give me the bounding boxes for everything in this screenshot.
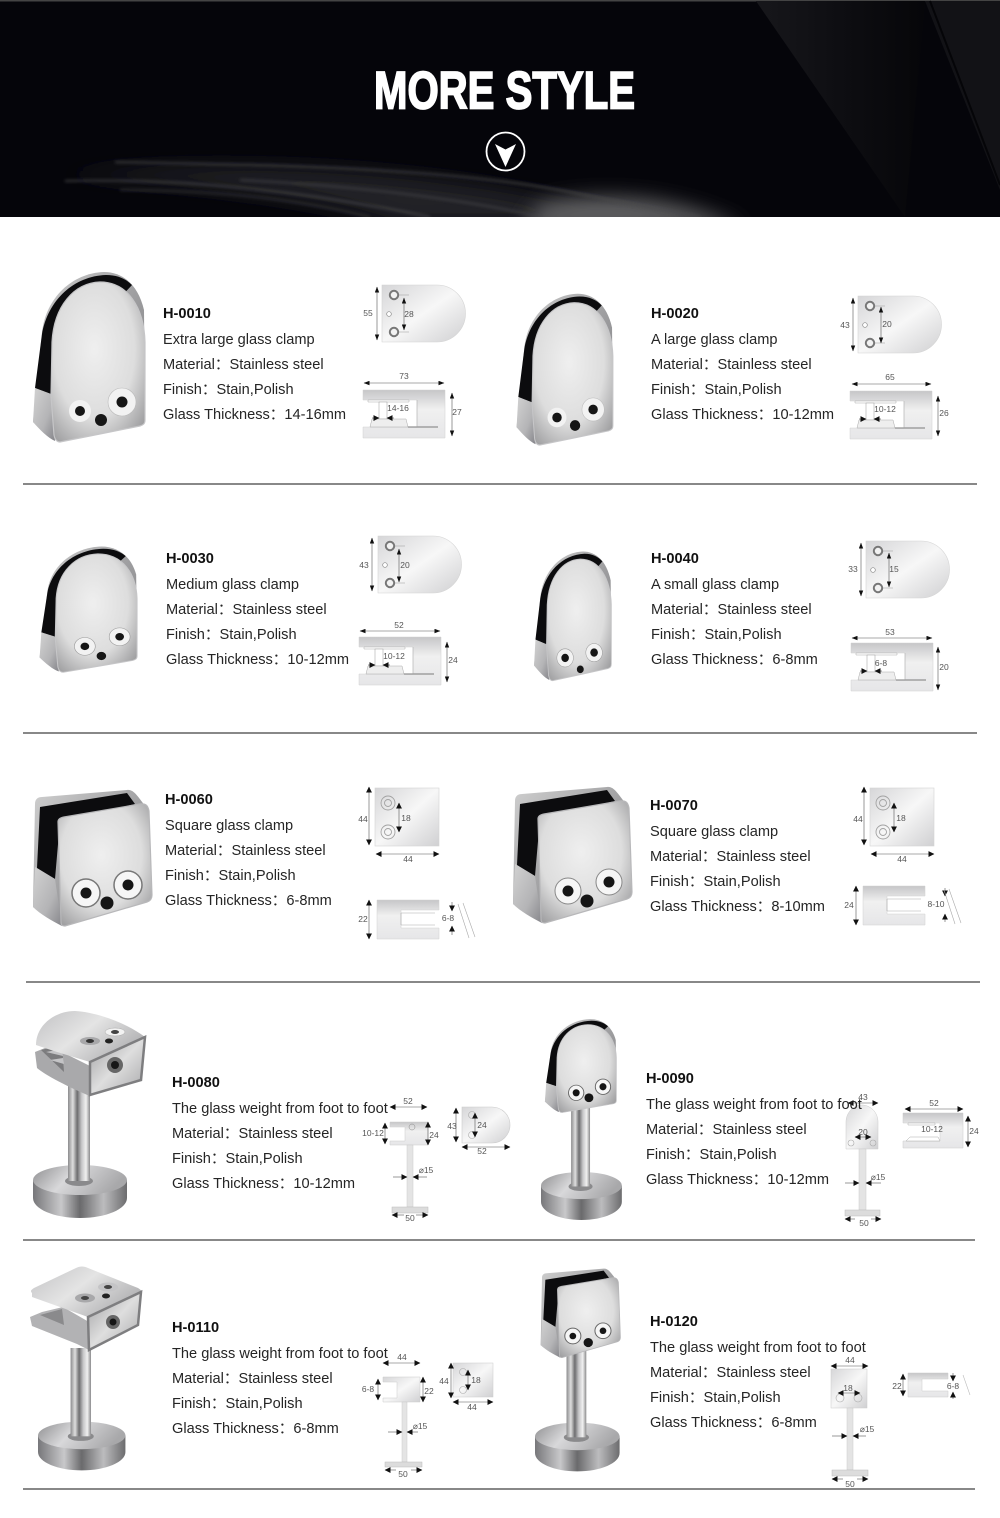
- photo: H-0060 clamp: [33, 790, 152, 926]
- drawing: H-0120 front view: [831, 1355, 875, 1489]
- separator: [23, 732, 977, 734]
- specs: H-0090: Material：Stainless steel: [646, 1122, 807, 1138]
- panel: H-0030: [40, 536, 462, 685]
- drawing: H-0040 top view: 33: [848, 564, 858, 574]
- drawing: H-0060 top view: 18: [401, 813, 411, 823]
- photo: H-0020 clamp: [517, 294, 613, 445]
- specs: H-0030: Medium glass clamp: [166, 577, 299, 593]
- specs: H-0040: Material：Stainless steel: [651, 602, 812, 618]
- drawing: H-0070 side view: 24: [844, 900, 854, 910]
- specs: H-0060: Material：Stainless steel: [165, 843, 326, 859]
- specs: H-0110: H-0110: [172, 1320, 219, 1336]
- specs: H-0060: Glass Thickness：6-8mm: [165, 893, 332, 909]
- drawing: H-0080 plate view: [447, 1107, 510, 1156]
- panel: H-0010: [33, 272, 466, 442]
- separator: [23, 483, 977, 485]
- specs: H-0020: Finish：Stain,Polish: [651, 382, 782, 398]
- specs: H-0060: Square glass clamp: [165, 818, 293, 834]
- specs: H-0030: Glass Thickness：10-12mm: [166, 652, 349, 668]
- specs: H-0090: Glass Thickness：10-12mm: [646, 1172, 829, 1188]
- panel: H-0110: [30, 1266, 493, 1479]
- specs: H-0080: Material：Stainless steel: [172, 1126, 333, 1142]
- drawing: H-0040 side view: 53: [885, 627, 895, 637]
- drawing: H-0040 side view: 20: [939, 662, 949, 672]
- drawing: H-0010 top view: 28: [404, 309, 414, 319]
- specs: H-0020: H-0020: [651, 306, 699, 322]
- drawing: H-0090 front view: 43: [858, 1092, 868, 1102]
- icon: circled down arrow: [486, 132, 524, 170]
- specs: H-0040: Glass Thickness：6-8mm: [651, 652, 818, 668]
- specs: H-0120: H-0120: [650, 1314, 698, 1330]
- drawing: H-0110 front view: 44: [397, 1352, 407, 1362]
- specs: H-0070: Square glass clamp: [650, 824, 778, 840]
- specs: H-0120: Finish：Stain,Polish: [650, 1390, 781, 1406]
- drawing: H-0020 side view: 10-12: [874, 404, 896, 414]
- drawing: H-0060 top view: [358, 787, 439, 864]
- panel: H-0120: [535, 1269, 970, 1489]
- drawing: H-0080 front view: 24: [429, 1130, 439, 1140]
- drawing: H-0060 top view: 44: [403, 854, 413, 864]
- drawing: H-0090 side view: 52: [929, 1098, 939, 1108]
- photo: H-0030 clamp: [40, 546, 137, 672]
- drawing: H-0070 side view: [844, 886, 961, 925]
- drawing: H-0070 top view: 18: [896, 813, 906, 823]
- drawing: H-0040 side view: 6-8: [875, 658, 887, 668]
- drawing: H-0030 top view: [359, 536, 462, 593]
- specs: H-0010: H-0010: [163, 306, 211, 322]
- drawing: H-0090 front view: 20: [858, 1127, 868, 1137]
- specs: H-0060: H-0060: [165, 792, 213, 808]
- drawing: H-0080 front view: 50: [405, 1213, 415, 1223]
- photo: H-0070 clamp: [513, 787, 632, 923]
- specs: H-0010: Material：Stainless steel: [163, 357, 324, 373]
- drawing: H-0030 side view: [359, 620, 458, 685]
- specs: H-0090: The glass weight from foot to foot: [646, 1097, 862, 1113]
- drawing: H-0070 top view: [853, 787, 934, 864]
- specs: H-0010: Finish：Stain,Polish: [163, 382, 294, 398]
- panel: H-0080: [33, 1011, 510, 1223]
- specs: H-0110: Material：Stainless steel: [172, 1371, 333, 1387]
- drawing: H-0090 front view: 50: [859, 1218, 869, 1228]
- specs: H-0030: Material：Stainless steel: [166, 602, 327, 618]
- drawing: H-0070 top view: 44: [853, 814, 863, 824]
- drawing: H-0090 front view: [845, 1092, 886, 1228]
- drawing: H-0020 side view: 65: [885, 372, 895, 382]
- drawing: H-0010 side view: 14-16: [387, 403, 409, 413]
- drawing: H-0070 top view: 44: [897, 854, 907, 864]
- drawing: H-0060 side view: [358, 900, 475, 939]
- drawing: H-0080 plate view: 43: [447, 1121, 457, 1131]
- drawing: H-0040 top view: 15: [889, 564, 899, 574]
- drawing: H-0030 top view: 20: [400, 560, 410, 570]
- drawing: H-0020 top view: 43: [840, 320, 850, 330]
- specs: H-0070: Finish：Stain,Polish: [650, 874, 781, 890]
- drawing: H-0090 side view: 10-12: [921, 1124, 943, 1134]
- drawing: H-0120 side view: 6-8: [947, 1381, 959, 1391]
- specs: H-0040: Finish：Stain,Polish: [651, 627, 782, 643]
- specs: H-0070: Glass Thickness：8-10mm: [650, 899, 825, 915]
- header banner: [0, 0, 1000, 230]
- drawing: H-0020 top view: [840, 296, 942, 353]
- drawing: H-0020 side view: [850, 372, 949, 439]
- specs: H-0110: Glass Thickness：6-8mm: [172, 1421, 339, 1437]
- panel: H-0070: [513, 787, 961, 925]
- drawing: H-0030 side view: 10-12: [383, 651, 405, 661]
- specs: H-0040: H-0040: [651, 551, 699, 567]
- drawing: H-0110 front view: 22: [424, 1386, 434, 1396]
- drawing: H-0060 top view: 44: [358, 814, 368, 824]
- panel: H-0060: [33, 787, 475, 939]
- specs: H-0080: H-0080: [172, 1075, 220, 1091]
- specs: H-0030: H-0030: [166, 551, 214, 567]
- drawing: H-0080 front view: [362, 1096, 439, 1223]
- specs: H-0090: Finish：Stain,Polish: [646, 1147, 777, 1163]
- drawing: H-0010 side view: [363, 371, 462, 438]
- drawing: H-0070 side view: 8-10: [927, 899, 945, 909]
- specs: H-0080: Finish：Stain,Polish: [172, 1151, 303, 1167]
- specs: H-0070: H-0070: [650, 798, 698, 814]
- separator: [23, 1488, 975, 1490]
- drawing: H-0040 side view: [851, 627, 949, 691]
- specs: H-0020: Glass Thickness：10-12mm: [651, 407, 834, 423]
- drawing: H-0110 plate view: 18: [471, 1375, 481, 1385]
- title: MORE STYLE: [374, 62, 635, 120]
- specs: H-0120: Material：Stainless steel: [650, 1365, 811, 1381]
- drawing: H-0120 front view: 18: [843, 1383, 853, 1393]
- drawing: H-0030 side view: 52: [394, 620, 404, 630]
- drawing: H-0120 front view: 50: [845, 1479, 855, 1489]
- specs: H-0070: Material：Stainless steel: [650, 849, 811, 865]
- drawing: H-0060 side view: 6-8: [442, 913, 454, 923]
- drawing: H-0110 front view: [362, 1352, 434, 1479]
- drawing: H-0080 front view: 10-12: [362, 1128, 384, 1138]
- drawing: H-0020 side view: 26: [939, 408, 949, 418]
- drawing: H-0110 front view: 50: [398, 1469, 408, 1479]
- drawing: H-0010 top view: [363, 285, 466, 342]
- specs: H-0090: H-0090: [646, 1071, 694, 1087]
- drawing: H-0010 side view: 27: [452, 407, 462, 417]
- photo: H-0010 clamp: [33, 272, 145, 442]
- specs: H-0060: Finish：Stain,Polish: [165, 868, 296, 884]
- drawing: H-0060 side view: 22: [358, 914, 368, 924]
- panel: H-0040: [534, 541, 950, 691]
- specs: H-0020: A large glass clamp: [651, 332, 778, 348]
- drawing: H-0120 side view: [892, 1373, 970, 1399]
- drawing: H-0090 side view: [903, 1098, 979, 1148]
- drawing: H-0030 top view: 43: [359, 560, 369, 570]
- specs: H-0110: The glass weight from foot to foot: [172, 1346, 388, 1362]
- drawing: H-0040 top view: [848, 541, 950, 598]
- specs: H-0010: Glass Thickness：14-16mm: [163, 407, 346, 423]
- drawing: H-0120 front view: ⌀15: [860, 1424, 875, 1434]
- drawing: H-0110 plate view: [439, 1363, 493, 1412]
- drawing: H-0110 plate view: 44: [439, 1376, 449, 1386]
- drawing: H-0080 plate view: 52: [477, 1146, 487, 1156]
- drawing: H-0090 front view: ⌀15: [871, 1172, 886, 1182]
- photo: H-0120 stand clamp: [535, 1269, 620, 1471]
- drawing: H-0120 side view: 22: [892, 1381, 902, 1391]
- photo: H-0040 clamp: [534, 552, 611, 681]
- drawing: H-0020 top view: 20: [882, 319, 892, 329]
- panel: H-0020: [517, 294, 949, 445]
- specs: H-0120: The glass weight from foot to foot: [650, 1340, 866, 1356]
- drawing: H-0010 top view: 55: [363, 308, 373, 318]
- specs: H-0030: Finish：Stain,Polish: [166, 627, 297, 643]
- separator: [26, 981, 980, 983]
- drawing: H-0080 front view: 52: [403, 1096, 413, 1106]
- drawing: H-0010 side view: 73: [399, 371, 409, 381]
- drawing: H-0120 front view: 44: [845, 1355, 855, 1365]
- drawing: H-0090 side view: 24: [969, 1126, 979, 1136]
- drawing: H-0110 front view: ⌀15: [413, 1421, 428, 1431]
- specs: H-0080: Glass Thickness：10-12mm: [172, 1176, 355, 1192]
- specs: H-0040: A small glass clamp: [651, 577, 779, 593]
- photo: H-0110 stand clamp: [30, 1266, 141, 1470]
- photo: H-0090 stand clamp: [541, 1019, 622, 1220]
- specs: H-0110: Finish：Stain,Polish: [172, 1396, 303, 1412]
- separator: [23, 1239, 975, 1241]
- specs: H-0120: Glass Thickness：6-8mm: [650, 1415, 817, 1431]
- drawing: H-0110 front view: 6-8: [362, 1384, 374, 1394]
- specs: H-0020: Material：Stainless steel: [651, 357, 812, 373]
- panel: H-0090: [541, 1019, 979, 1228]
- drawing: H-0080 front view: ⌀15: [419, 1165, 434, 1175]
- photo: H-0080 stand clamp: [33, 1011, 145, 1218]
- drawing: H-0080 plate view: 24: [477, 1120, 487, 1130]
- drawing: H-0110 plate view: 44: [467, 1402, 477, 1412]
- specs: H-0080: The glass weight from foot to foot: [172, 1101, 388, 1117]
- drawing: H-0030 side view: 24: [448, 655, 458, 665]
- specs: H-0010: Extra large glass clamp: [163, 332, 315, 348]
